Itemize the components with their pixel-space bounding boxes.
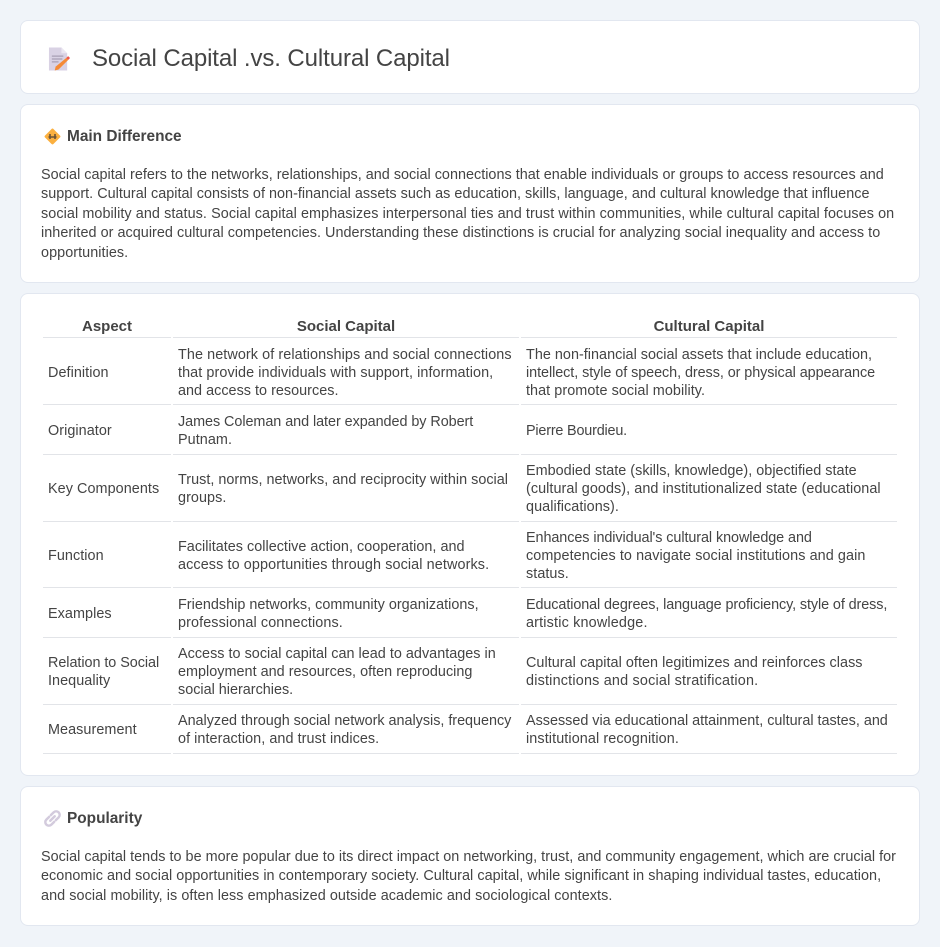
table row: relation to social inequality [48,646,863,698]
table row: function: Facilitates collective action, cooperation, and [178,539,465,555]
table row: key components: qualifications). [526,499,619,515]
table row: originator: James Coleman and later expanded by Robert [178,414,473,430]
table row: originator: Originator [48,423,112,439]
table row: originator: Putnam. [178,432,232,448]
table row: relation to social inequality: social hierarchies. [178,682,293,698]
table row: key components [48,463,881,515]
text block: main difference paragraph: support. Cultural capital consists of non-financial assets such as education, skills, language, and cultural knowledge that influence [41,186,869,202]
text block: popularity paragraph: economic and social opportunities in contemporary society. Cultural capital, while significant in shaping individual tastes, education, [41,868,881,884]
title: Social Capital .vs. Cultural Capital [92,45,450,72]
table row: definition: that promote social mobility. [526,383,705,399]
table row: examples: professional connections. [178,615,343,631]
table row: measurement: Analyzed through social network analysis, frequency [178,713,511,729]
table row: originator: Pierre Bourdieu. [526,423,627,439]
table row: examples: Educational degrees, language proficiency, style of dress, [526,597,887,613]
table row: function: competencies to navigate social institutions and gain [526,548,865,564]
text block: popularity paragraph [41,849,896,904]
icon: warning diamond [44,128,60,144]
table row: originator [48,414,627,448]
table row: key components: groups. [178,490,226,506]
panel: main difference [20,104,920,283]
table row: measurement: institutional recognition. [526,731,679,747]
table row: definition: The network of relationships and social connections [178,347,512,363]
table row: function: access to opportunities through social networks. [178,557,489,573]
table row: measurement: of interaction, and trust indices. [178,731,379,747]
table row: definition: and access to resources. [178,383,338,399]
table header [82,318,764,335]
panel: title header [20,20,920,94]
table row: function: Function [48,548,104,564]
text block: main difference paragraph [41,167,894,261]
table row: examples: artistic knowledge. [526,615,648,631]
text block: main difference paragraph: Social capital refers to the networks, relationships, and social connections that enable individuals or groups to access resources and [41,167,884,183]
table row: definition: Definition [48,365,109,381]
table row: examples: Friendship networks, community organizations, [178,597,479,613]
table row: relation to social inequality: Inequality [48,673,110,689]
table row: definition: that provide individuals with support, information, [178,365,493,381]
table row: measurement: Assessed via educational attainment, cultural tastes, and [526,713,888,729]
table row: relation to social inequality: Cultural capital often legitimizes and reinforces class [526,655,863,671]
table row: measurement: Measurement [48,722,137,738]
heading: main difference: Main Difference [67,128,182,145]
icon: link [44,810,61,827]
text block: main difference paragraph: inherited or acquired cultural competencies. Understanding these distinctions is crucial for analyzing social inequality and access to [41,225,880,241]
table row: examples [48,597,887,631]
table row: measurement [48,713,888,747]
table row: key components: Embodied state (skills, knowledge), objectified state [526,463,857,479]
text block: main difference paragraph: social mobility and status. Social capital emphasizes interpersonal ties and trust within communities, while cultural capital focuses on [41,206,894,222]
table row: function [48,530,865,582]
table row: definition [48,347,875,399]
table row: function: Enhances individual's cultural knowledge and [526,530,812,546]
table row: relation to social inequality: Access to social capital can lead to advantages in [178,646,496,662]
panel: popularity [20,786,920,926]
icon: document with pencil [49,48,70,70]
table row: relation to social inequality: distinctions and social stratification. [526,673,758,689]
table row: relation to social inequality: employment and resources, often reproducing [178,664,472,680]
table header: Aspect [82,318,132,335]
table row: function: status. [526,566,569,582]
table row: relation to social inequality: Relation to Social [48,655,159,671]
table row: key components: Trust, norms, networks, and reciprocity within social [178,472,508,488]
table row: examples: Examples [48,606,112,622]
table header: Social Capital [297,318,395,335]
table header: Cultural Capital [654,318,764,335]
text block: popularity paragraph: Social capital tends to be more popular due to its direct impact on networking, trust, and community engagement, which are crucial for [41,849,896,865]
panel: comparison table [20,293,920,776]
text block: main difference paragraph: opportunities. [41,245,128,261]
heading: popularity: Popularity [67,810,142,827]
table row: key components: Key Components [48,481,159,497]
table row: key components: (cultural goods), and institutionalized state (educational [526,481,881,497]
text block: popularity paragraph: and social mobility, is often less emphasized outside academic and sociological contexts. [41,888,612,904]
table row: definition: The non-financial social assets that include education, [526,347,872,363]
table row: definition: intellect, style of speech, dress, or physical appearance [526,365,875,381]
